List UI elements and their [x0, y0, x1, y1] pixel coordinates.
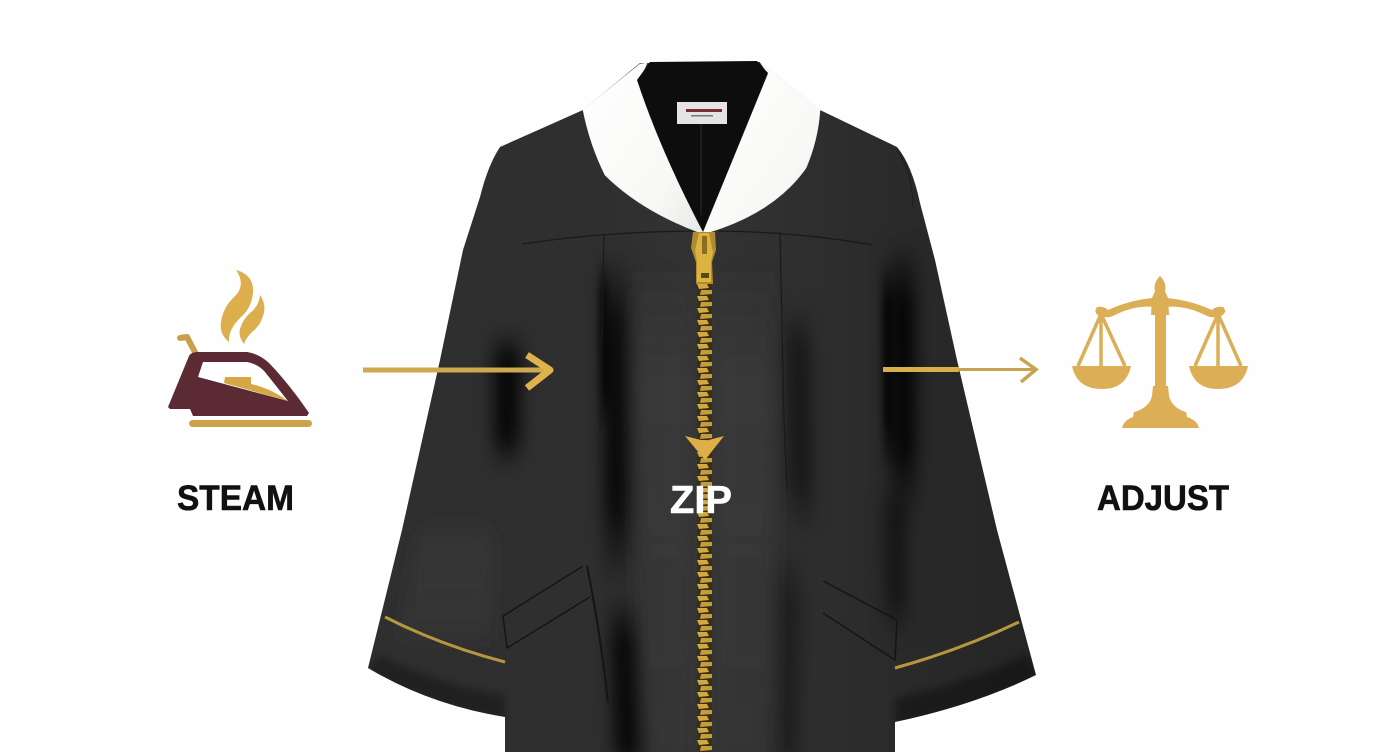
collar right [703, 62, 820, 232]
label: STEAM: STEAM [177, 479, 294, 518]
label: ZIP: ZIP [670, 479, 732, 522]
scale beam [1095, 298, 1225, 317]
sleeve trim [385, 617, 1019, 668]
collar left [583, 63, 705, 232]
scale column [1155, 312, 1166, 390]
zipper tape and teeth [697, 284, 712, 752]
gown folds and shading [368, 240, 1036, 752]
right pan [1189, 366, 1248, 389]
icon: balance scale [1072, 276, 1248, 428]
scale base [1122, 386, 1199, 428]
garment label [677, 102, 727, 124]
right pan strings [1195, 314, 1241, 366]
right pocket [823, 581, 897, 660]
iron base line [189, 420, 312, 427]
yoke seams [523, 150, 913, 490]
icon: steam iron [168, 270, 312, 427]
scale finial [1151, 276, 1169, 315]
arrow: gown to adjust [883, 358, 1036, 382]
left pan [1072, 366, 1131, 389]
centre back seam [700, 124, 702, 215]
neck interior [637, 61, 768, 232]
arrow: down to zip [685, 436, 724, 460]
iron handle hook [180, 337, 196, 354]
iron gold plate [224, 377, 288, 401]
arrow: steam to gown [363, 355, 550, 388]
left pocket [503, 566, 608, 702]
gown [368, 61, 1036, 752]
label: ADJUST: ADJUST [1097, 479, 1229, 518]
iron window [198, 362, 288, 401]
zipper pull [691, 232, 716, 284]
left pan strings [1078, 314, 1125, 366]
iron body [168, 352, 309, 416]
iron steam [221, 270, 264, 344]
gown body silhouette [368, 62, 1036, 752]
